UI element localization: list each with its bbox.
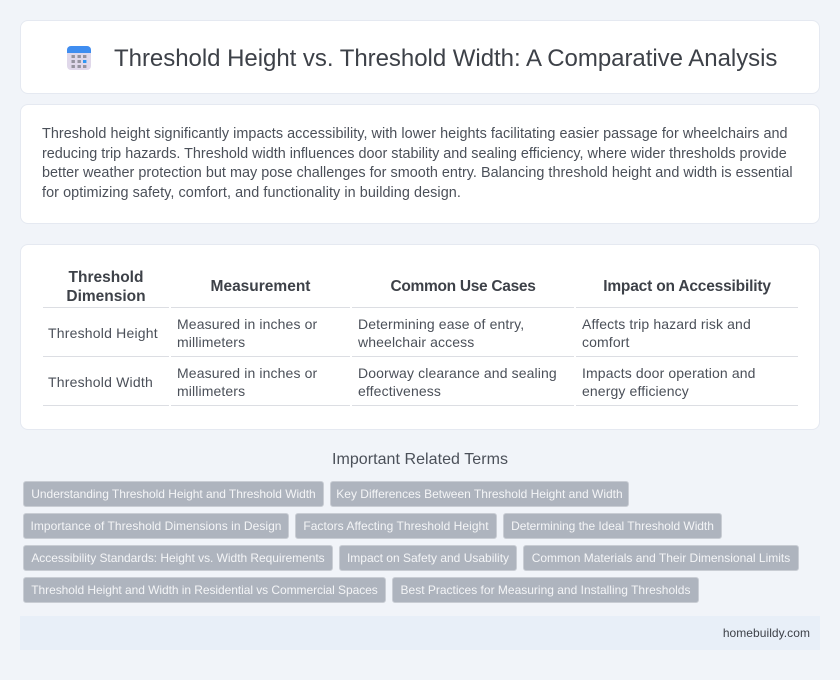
- related term tags: Best Practices for Measuring and Installing Thresholds: [401, 583, 690, 597]
- row: threshold width: energy efficiency: [582, 383, 689, 399]
- table header: Common Use Cases: [390, 278, 536, 295]
- row: threshold height: Affects trip hazard risk and: [582, 316, 751, 332]
- table header: Measurement: [211, 278, 310, 295]
- related term tags: [23, 481, 799, 603]
- related term tags: Factors Affecting Threshold Height: [303, 519, 489, 533]
- title: Threshold Height vs. Threshold Width: A Comparative Analysis: [114, 45, 777, 72]
- heading: related terms: Important Related Terms: [332, 451, 508, 468]
- row: threshold height: Determining ease of entry,: [358, 316, 524, 332]
- related term tags: Impact on Safety and Usability: [347, 551, 509, 565]
- row: threshold width: Threshold Width: [48, 374, 153, 390]
- intro paragraph: for optimizing safety, comfort, and functionality in building design.: [42, 184, 461, 200]
- footer: [20, 616, 820, 650]
- row: threshold height: comfort: [582, 334, 630, 350]
- intro paragraph: [42, 126, 793, 200]
- table header: Threshold: [69, 269, 143, 286]
- row: threshold height: millimeters: [177, 334, 245, 350]
- intro paragraph: Threshold height significantly impacts accessibility, with lower heights facilitating easier passage for wheelchairs and: [42, 126, 788, 142]
- related term tags: Threshold Height and Width in Residential vs Commercial Spaces: [31, 583, 378, 597]
- intro paragraph: better weather protection but may pose challenges for smooth entry. Balancing threshold height and width is essential: [42, 165, 793, 181]
- row: threshold height: Measured in inches or: [177, 316, 317, 332]
- row: threshold width: Impacts door operation and: [582, 365, 756, 381]
- related term tags: Importance of Threshold Dimensions in Design: [30, 519, 282, 533]
- footer source: homebuildy.com: [723, 626, 810, 640]
- row: threshold height: [43, 316, 798, 357]
- related term tags: Common Materials and Their Dimensional Limits: [532, 551, 790, 565]
- row: threshold width: Measured in inches or: [177, 365, 317, 381]
- related term tags: Understanding Threshold Height and Threshold Width: [31, 487, 316, 501]
- table header: [43, 269, 798, 308]
- row: threshold width: effectiveness: [358, 383, 441, 399]
- intro paragraph: reducing trip hazards. Threshold width influences door stability and sealing efficiency, where wider thresholds provide: [42, 146, 787, 162]
- related term tags: Determining the Ideal Threshold Width: [511, 519, 714, 533]
- icon: calendar: [67, 46, 91, 70]
- panel: header: [20, 20, 820, 94]
- table header: Impact on Accessibility: [603, 278, 771, 295]
- row: threshold width: Doorway clearance and sealing: [358, 365, 557, 381]
- row: threshold height: wheelchair access: [358, 334, 474, 350]
- panel: comparison table: [20, 244, 820, 430]
- table header: Dimension: [66, 288, 146, 305]
- row: threshold width: millimeters: [177, 383, 245, 399]
- row: threshold width: [43, 365, 798, 406]
- related term tags: Key Differences Between Threshold Height and Width: [336, 487, 623, 501]
- row: threshold height: Threshold Height: [48, 325, 158, 341]
- panel: intro text: [20, 104, 820, 224]
- related term tags: Accessibility Standards: Height vs. Width Requirements: [31, 551, 325, 565]
